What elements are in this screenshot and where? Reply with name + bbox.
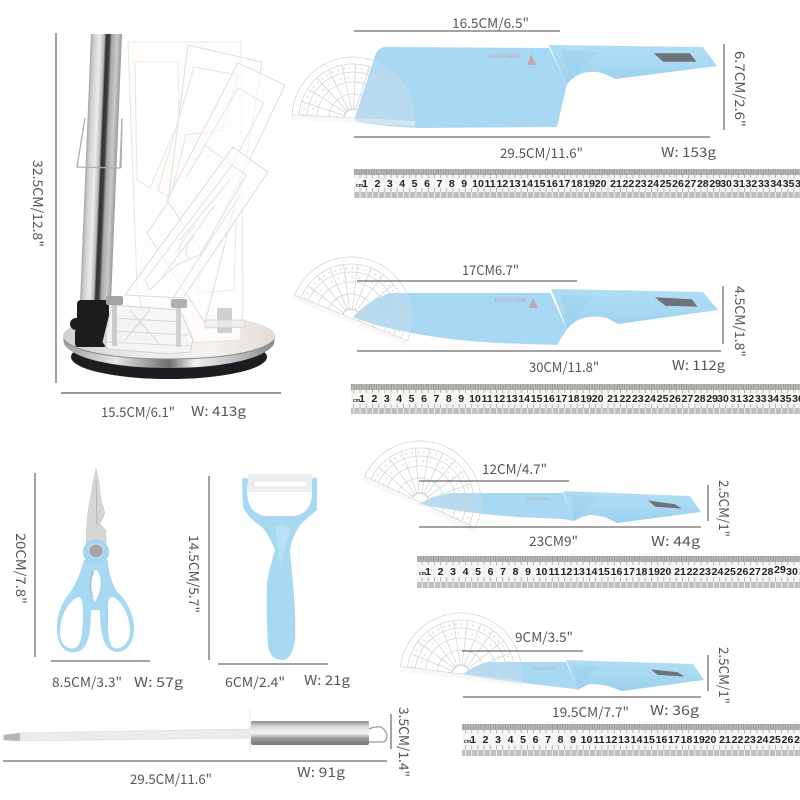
ruler 1: cm (356, 183, 364, 189)
utility blade (418, 493, 574, 521)
sharpener handle (251, 721, 369, 745)
scissors pivot (83, 539, 109, 565)
ruler 2: 34 (767, 393, 779, 405)
chef grip texture (560, 295, 594, 320)
ruler 3: 28 (762, 566, 773, 578)
acrylic front block (103, 296, 245, 354)
ruler 3 (417, 556, 800, 588)
cleaver brand mark: EVORTVERN (489, 54, 520, 60)
ruler 1: 22 (623, 178, 634, 190)
ruler 3: 3 (450, 566, 456, 578)
ruler 1: 6 (424, 178, 430, 190)
ruler 4: 16 (656, 734, 667, 746)
paring knife (399, 606, 704, 691)
dimension: paring height line (707, 655, 709, 691)
ruler 4: 15 (643, 734, 655, 746)
label: sharpener weight: W: 91g (297, 761, 345, 781)
ruler 2: 33 (755, 393, 767, 405)
steel tube (80, 34, 122, 304)
utility handle slot (647, 500, 683, 509)
dimension: stand width line (61, 392, 281, 394)
ruler 4: 18 (681, 734, 692, 746)
ruler 4: 1 (470, 734, 476, 746)
ruler 1: 3 (387, 178, 393, 190)
paring handle slot (650, 669, 686, 677)
cleaver brand mark (489, 54, 536, 65)
ruler 1: 5 (412, 178, 418, 190)
label: utility blade length: 12CM/4.7" (482, 458, 547, 478)
ruler 2: 10 (469, 393, 481, 405)
ruler 3: 5 (475, 566, 481, 578)
dimension: cleaver total line (354, 136, 710, 138)
chef handle slot (654, 297, 698, 307)
ruler 2: 18 (568, 393, 580, 405)
ruler 3: 19 (648, 566, 660, 578)
ruler 4: 12 (606, 734, 617, 746)
paring handle (566, 660, 704, 691)
ruler 3: 12 (561, 566, 572, 578)
ruler 1: 18 (571, 178, 583, 190)
ruler 2: 12 (494, 393, 505, 405)
dimension: peeler width line (218, 663, 328, 665)
ruler 4: 20 (705, 734, 716, 746)
chef brand mark (495, 298, 538, 308)
label: cleaver weight: W: 153g (661, 141, 716, 161)
label: peeler weight: W: 21g (304, 669, 350, 689)
ruler 2: 30 (717, 393, 729, 405)
label: scissors weight: W: 57g (134, 671, 183, 691)
cleaver blade (355, 47, 567, 128)
label: paring weight: W: 36g (650, 699, 699, 719)
ruler 4: 13 (618, 734, 630, 746)
acrylic blade holder small (125, 147, 268, 300)
sharpener hanging loop (369, 727, 387, 742)
chef blade (353, 293, 567, 345)
ruler 2: 15 (531, 393, 543, 405)
dimension: sharpener height line (390, 714, 392, 749)
label: utility total length: 23CM9" (529, 530, 578, 550)
dimension: utility blade line (419, 480, 569, 482)
scissors blade hinge line (96, 480, 97, 525)
paring protractor (399, 606, 530, 687)
dimension: paring total line (463, 696, 701, 698)
cleaver knife (291, 45, 717, 128)
dimension: paring blade line (462, 650, 583, 652)
ruler 2: cm (353, 398, 361, 404)
ruler 2: 22 (620, 393, 631, 405)
ruler 4: 17 (668, 734, 680, 746)
cleaver handle slot (653, 53, 697, 62)
ruler 2: 20 (592, 393, 604, 405)
ruler 1: 19 (583, 178, 595, 190)
sharpener rod (3, 729, 250, 741)
ruler 3: 14 (586, 566, 597, 578)
ruler 2: 4 (396, 393, 402, 405)
sharpener tip (4, 733, 20, 741)
ruler 4: 11 (593, 734, 605, 746)
sharpening steel (3, 710, 387, 753)
ruler 3: 11 (548, 566, 560, 578)
ruler 3: 20 (660, 566, 671, 578)
dimension: cleaver blade line (354, 30, 560, 32)
ruler 1: 35 (783, 178, 795, 190)
ruler 3: 8 (513, 566, 519, 578)
ruler 2: 3 (384, 393, 390, 405)
label: scissors height: 20CM/7.8" (12, 533, 32, 604)
ruler 2: 32 (743, 393, 754, 405)
ruler 2: 29 (706, 393, 718, 405)
ruler 3: 1 (425, 566, 431, 578)
dimension: chef total line (357, 350, 721, 352)
ruler 1: 14 (521, 178, 533, 190)
ruler 2: 17 (556, 393, 567, 405)
ruler 1: 27 (685, 178, 696, 190)
label: scissors width: 8.5CM/3.3" (52, 671, 122, 691)
ruler 1: 25 (660, 178, 672, 190)
ruler 1: 31 (733, 178, 745, 190)
chef protractor (292, 238, 431, 346)
ruler 1: 21 (610, 178, 622, 190)
ruler 1: 7 (436, 178, 442, 190)
label: sharpener length: 29.5CM/11.6" (130, 768, 212, 788)
dimension: chef blade line (357, 280, 577, 282)
ruler 1 (354, 169, 800, 198)
utility handle (563, 491, 701, 523)
ruler 4: 5 (520, 734, 526, 746)
black collar (70, 300, 109, 347)
ruler 3: 29 (774, 564, 786, 576)
label: stand weight: W: 413g (191, 400, 246, 420)
ruler 3: 22 (687, 566, 698, 578)
ruler 1: 4 (399, 178, 405, 190)
paring grip texture (572, 664, 600, 685)
paring blade (463, 662, 578, 690)
ruler 3: 9 (525, 566, 531, 578)
label: paring total length: 19.5CM/7.7" (552, 701, 629, 721)
dimension: peeler height line (208, 476, 210, 660)
ruler 1: 29 (709, 178, 721, 190)
ruler 2: 8 (446, 393, 452, 405)
stand base disc (63, 313, 275, 379)
ruler 3: 16 (611, 566, 622, 578)
ruler 3: 30 (786, 566, 798, 578)
label: paring blade length: 9CM/3.5" (515, 626, 573, 646)
ruler 4: 26 (782, 734, 793, 746)
ruler 2: 9 (458, 393, 464, 405)
ruler 1: 28 (697, 178, 709, 190)
chef knife (292, 238, 718, 346)
ruler 2: 2 (371, 393, 377, 405)
acrylic blade holder large (147, 45, 262, 323)
ruler 4: 24 (757, 734, 768, 746)
ruler 3: 26 (737, 566, 748, 578)
label: peeler height: 14.5CM/5.7" (185, 535, 205, 613)
ruler 3: 23 (699, 566, 711, 578)
knife stand (63, 34, 285, 379)
cleaver handle (549, 45, 717, 84)
ruler 4: 25 (769, 734, 781, 746)
utility brand mark: EVORTVERN (527, 497, 549, 501)
ruler 2: 1 (359, 393, 365, 405)
ruler 3: 27 (749, 566, 761, 578)
ruler 2: 5 (409, 393, 415, 405)
label: stand width: 15.5CM/6.1" (101, 401, 175, 421)
cleaver grip texture (560, 50, 600, 75)
chef brand mark: EVORTVERN (495, 298, 526, 304)
ruler 1: 12 (497, 178, 508, 190)
ruler 4: 21 (719, 734, 731, 746)
ruler 4: 19 (693, 734, 705, 746)
ruler 3: cm (419, 571, 427, 577)
ruler 2: 13 (506, 393, 518, 405)
ruler 2: 35 (780, 393, 792, 405)
ruler 2: 11 (481, 393, 493, 405)
label: cleaver height: 6.7CM/2.6" (731, 51, 751, 127)
label: chef weight: W: 112g (672, 354, 725, 374)
ruler 1: 11 (484, 178, 496, 190)
label: chef height: 4.5CM/1.8" (731, 286, 751, 357)
dimension: utility height line (707, 485, 709, 521)
label: stand height: 32.5CM/12.8" (29, 160, 49, 247)
utility knife (362, 421, 701, 533)
scissors serrated jaw (90, 572, 93, 597)
peeler blade (248, 474, 312, 492)
ruler 1: 10 (472, 178, 484, 190)
ruler 2: 24 (644, 393, 656, 405)
ruler 3: 18 (636, 566, 647, 578)
ruler 1: 30 (720, 178, 732, 190)
dimension: scissors width line (51, 660, 150, 662)
ruler 2: 7 (433, 393, 439, 405)
label: chef total length: 30CM/11.8" (529, 356, 599, 376)
label: utility weight: W: 44g (651, 530, 700, 550)
ruler 1: 17 (559, 178, 570, 190)
ruler 3: 15 (598, 566, 610, 578)
ruler 1: 23 (635, 178, 647, 190)
dimension: stand height line (55, 33, 57, 383)
scissors body with finger loops (57, 560, 134, 652)
ruler 2: 28 (694, 393, 706, 405)
chef handle (551, 289, 718, 329)
ruler 1: 33 (758, 178, 770, 190)
ruler 3: 21 (674, 566, 686, 578)
ruler 1: 15 (534, 178, 546, 190)
utility protractor (362, 421, 502, 533)
dimension: sharpener length line (3, 760, 387, 762)
ruler 3: 10 (536, 566, 547, 578)
ruler 2: 23 (632, 393, 644, 405)
ruler 3: 2 (438, 566, 444, 578)
ruler 4: 8 (558, 734, 564, 746)
ruler 2: 21 (607, 393, 619, 405)
label: chef blade length: 17CM6.7" (462, 259, 519, 279)
ruler 3: 17 (623, 566, 635, 578)
ruler 4: 6 (533, 734, 539, 746)
ruler 4: 9 (570, 734, 576, 746)
ruler 4: 10 (581, 734, 592, 746)
ruler 3: 24 (712, 566, 723, 578)
scissors blades (86, 468, 106, 545)
ruler 4: cm (464, 739, 472, 745)
label: cleaver blade length: 16.5CM/6.5" (452, 12, 529, 32)
ruler 1: 9 (461, 178, 467, 190)
ruler 2: 19 (580, 393, 592, 405)
paring brand mark: EVORTVERN (533, 667, 555, 671)
ceramic peeler (242, 474, 317, 660)
peeler highlight (275, 525, 291, 565)
ruler 2: 31 (730, 393, 742, 405)
wire hook on tube (77, 118, 122, 168)
ruler 2: 14 (518, 393, 530, 405)
acrylic blade holder medium (167, 63, 285, 253)
ruler 2: 27 (682, 393, 693, 405)
ruler 3: 7 (500, 566, 506, 578)
ruler 1: 20 (595, 178, 607, 190)
label: paring height: 2.5CM/1" (715, 647, 735, 704)
ruler 4: 7 (545, 734, 551, 746)
acrylic back panel cutouts (135, 62, 236, 293)
ruler 1: 8 (449, 178, 455, 190)
ruler 4 (462, 724, 800, 756)
ruler 4: 23 (744, 734, 756, 746)
ruler 1: 26 (672, 178, 684, 190)
ruler 4: 4 (508, 734, 514, 746)
ruler 1: 2 (374, 178, 380, 190)
cleaver protractor (291, 54, 418, 126)
ruler 3: 6 (488, 566, 494, 578)
ruler 1: 24 (647, 178, 659, 190)
ruler 3: 4 (463, 566, 469, 578)
label: cleaver total length: 29.5CM/11.6" (500, 142, 583, 162)
ruler 4: 2 (483, 734, 489, 746)
label: sharpener height: 3.5CM/1.4" (395, 707, 415, 777)
label: peeler width: 6CM/2.4" (225, 671, 285, 691)
ruler 1: 34 (770, 178, 782, 190)
acrylic back panel (128, 42, 243, 345)
ruler 1: 13 (509, 178, 521, 190)
ruler 4: 14 (631, 734, 642, 746)
ruler 3: 25 (724, 566, 736, 578)
ruler 4: 22 (732, 734, 743, 746)
ruler 1: 16 (546, 178, 558, 190)
utility grip texture (570, 495, 598, 516)
dimension: scissors height line (34, 473, 36, 657)
ruler 2: 26 (669, 393, 681, 405)
ruler 4: 3 (495, 734, 501, 746)
dimension: cleaver height line (723, 44, 725, 130)
kitchen scissors (57, 468, 134, 652)
dimension: chef height line (722, 286, 724, 344)
ruler 2 (351, 384, 800, 414)
ruler 1: 1 (362, 178, 368, 190)
ruler 2: 16 (543, 393, 555, 405)
ruler 2: 6 (421, 393, 427, 405)
dimension: utility total line (419, 526, 701, 528)
peeler body (242, 478, 317, 660)
label: utility height: 2.5CM/1" (715, 480, 735, 537)
sharpener guard (249, 710, 251, 753)
ruler 1: 32 (746, 178, 757, 190)
ruler 3: 13 (573, 566, 585, 578)
ruler 2: 25 (657, 393, 669, 405)
